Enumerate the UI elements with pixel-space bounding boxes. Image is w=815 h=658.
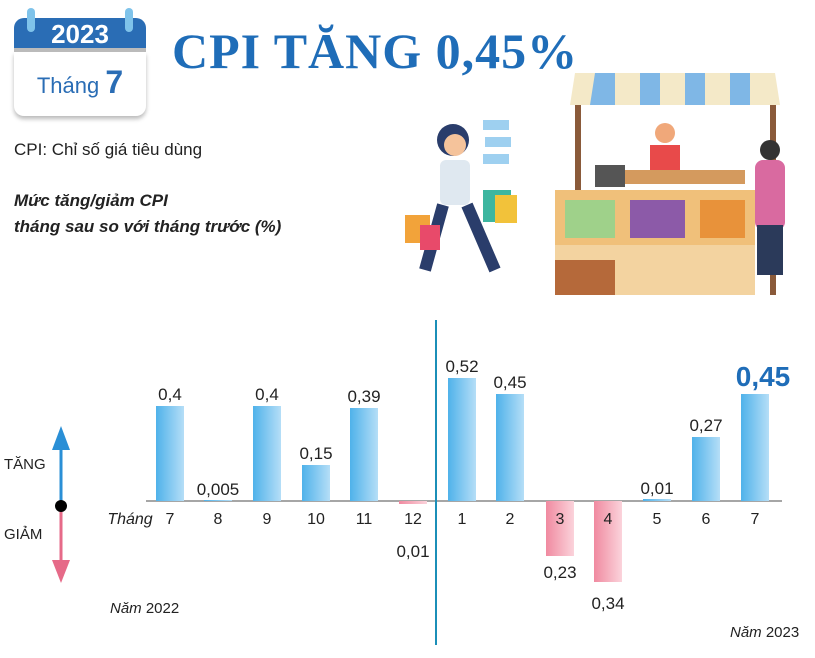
bar chart: 11: [356, 511, 372, 528]
legend arrow: tăng / giảm: TĂNG: [4, 456, 46, 473]
legend arrow: tăng / giảm: GIẢM: [4, 526, 42, 543]
bar chart: 6: [702, 511, 711, 528]
bar chart: 3: [556, 511, 565, 528]
bar chart: 0,27: [689, 416, 723, 435]
bar chart: 0,005: [197, 480, 239, 499]
bar chart: 2: [506, 511, 515, 528]
bar chart: 10: [307, 511, 325, 528]
bar chart: 7: [751, 511, 760, 528]
definition text: CPI: Chỉ số giá tiêu dùng: [14, 140, 202, 159]
bar chart: 0,45: [736, 361, 790, 392]
bar chart: 0,01: [396, 542, 430, 561]
bar chart: 0,34: [591, 594, 625, 613]
illustration: shopper and market stall: [405, 73, 785, 295]
bar chart: Năm 2023: [730, 624, 799, 641]
bar chart: Năm 2022: [110, 600, 179, 617]
calendar icon: Tháng 7: [37, 64, 123, 100]
title: CPI TĂNG 0,45%: [172, 23, 578, 79]
bar chart: 12: [404, 511, 422, 528]
bar chart: 0,39: [347, 387, 381, 406]
bar chart: 4: [604, 511, 613, 528]
calendar icon: [12, 8, 148, 122]
bar chart: 9: [263, 511, 272, 528]
legend arrow: tăng / giảm: [4, 426, 70, 583]
bar chart: 7: [166, 511, 175, 528]
bar chart: 0,23: [543, 563, 577, 582]
bar chart: 1: [458, 511, 467, 528]
bar chart: 0,15: [299, 444, 333, 463]
bar chart: 0,52: [445, 357, 479, 376]
bar chart: Tháng: [107, 511, 153, 528]
calendar icon: 2023: [51, 19, 109, 49]
bar chart: 0,4: [158, 385, 182, 404]
bar chart: 0,01: [640, 479, 674, 498]
bar chart: 5: [653, 511, 662, 528]
subtitle: tháng sau so với tháng trước (%): [14, 217, 281, 236]
bar chart: 0,4: [255, 385, 279, 404]
bar chart: 8: [214, 511, 223, 528]
subtitle: [14, 191, 281, 236]
bar chart: 0,45: [493, 373, 527, 392]
subtitle: Mức tăng/giảm CPI: [14, 191, 168, 210]
